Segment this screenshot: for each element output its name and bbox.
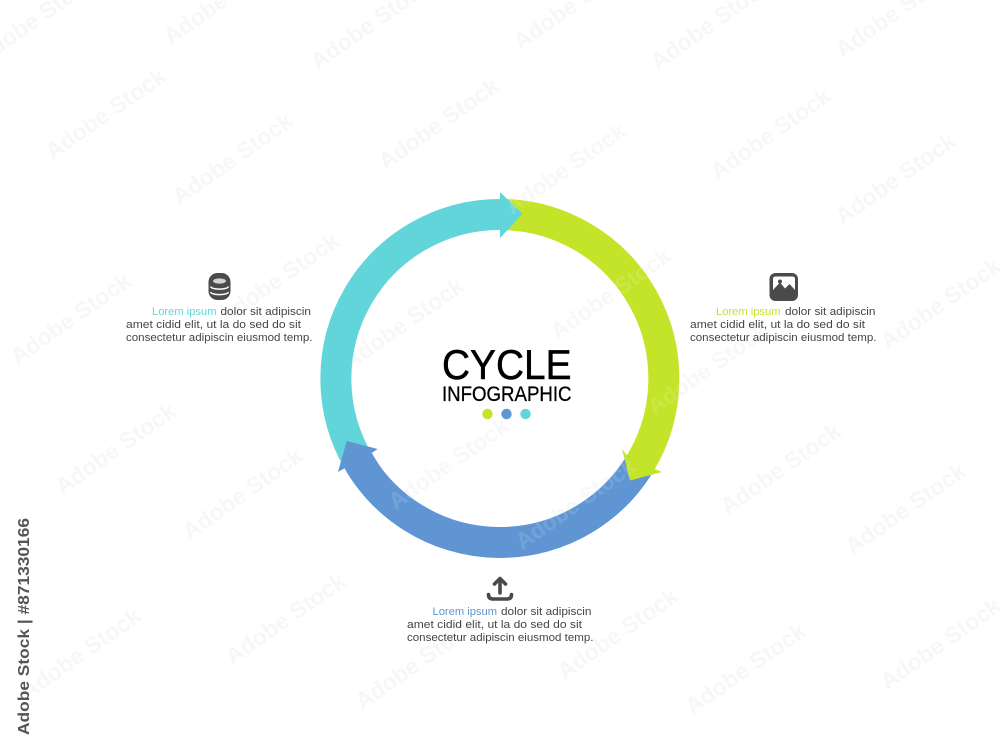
title: INFOGRAPHIC: [442, 383, 572, 406]
text: Adobe Stock: [5, 267, 136, 369]
text: Adobe Stock: [383, 412, 514, 514]
text: Adobe Stock: [642, 317, 773, 419]
text: Adobe Stock: [830, 127, 961, 229]
text block: left: amet cidid elit, ut la do sed do sit: [126, 319, 302, 331]
text: Adobe Stock: [545, 242, 676, 344]
text: Adobe Stock: [338, 272, 469, 374]
text: Adobe Stock: [510, 452, 641, 554]
text: Adobe Stock: [680, 617, 811, 719]
text: Adobe Stock: [552, 582, 683, 684]
icon: database: [208, 273, 230, 300]
text block: right: Lorem ipsum: [716, 306, 780, 318]
icon: upload: [488, 578, 512, 599]
text: Adobe Stock: [15, 602, 146, 704]
text: Adobe Stock: [213, 227, 344, 329]
text: Adobe Stock: [715, 417, 846, 519]
text block: bottom: dolor sit adipiscin: [501, 606, 592, 618]
text: Adobe Stock: [545, 242, 676, 344]
arrow: green segment: [500, 214, 664, 480]
text block: bottom: [407, 606, 594, 644]
text block: left: [126, 306, 312, 344]
text block: right: consectetur adipiscin eiusmod temp.: [690, 332, 876, 344]
text: Adobe Stock: [220, 567, 351, 669]
arrow: blue segment body: [358, 461, 640, 542]
text: Adobe Stock: [510, 452, 641, 554]
text: Adobe Stock: [500, 117, 631, 219]
title: [442, 341, 572, 406]
text: Adobe Stock: [167, 107, 298, 209]
text block: bottom: Lorem ipsum: [432, 606, 497, 618]
text: Adobe Stock: [383, 412, 514, 514]
text block: right: [690, 306, 876, 344]
icon: image: [770, 273, 798, 301]
text: Adobe Stock: [705, 82, 836, 184]
text block: bottom: amet cidid elit, ut la do sed do sit: [407, 619, 583, 631]
text: Adobe Stock: [40, 62, 171, 164]
text: Adobe Stock: [177, 442, 308, 544]
text block: right: dolor sit adipiscin: [785, 306, 876, 318]
text block: left: consectetur adipiscin eiusmod temp.: [126, 332, 312, 344]
text: Adobe Stock: [840, 457, 971, 559]
text block: bottom: consectetur adipiscin eiusmod temp.: [407, 632, 594, 644]
text block: right: amet cidid elit, ut la do sed do sit: [690, 319, 866, 331]
arrow: teal segment: [336, 192, 522, 461]
text: Adobe Stock: [500, 117, 631, 219]
cycle ring with three arrows: [336, 192, 664, 542]
title colour dots: [482, 409, 531, 419]
arrow: blue arrowhead: [338, 441, 381, 484]
text block: left: Lorem ipsum: [152, 306, 216, 318]
text: Adobe Stock: [50, 397, 181, 499]
text: Adobe Stock: [642, 317, 773, 419]
text: Adobe Stock: [350, 612, 481, 714]
title: CYCLE: [442, 341, 572, 388]
stock id caption: Adobe Stock | #871330166: [16, 518, 33, 735]
text: Adobe Stock: [373, 72, 504, 174]
text block: left: dolor sit adipiscin: [220, 306, 311, 318]
